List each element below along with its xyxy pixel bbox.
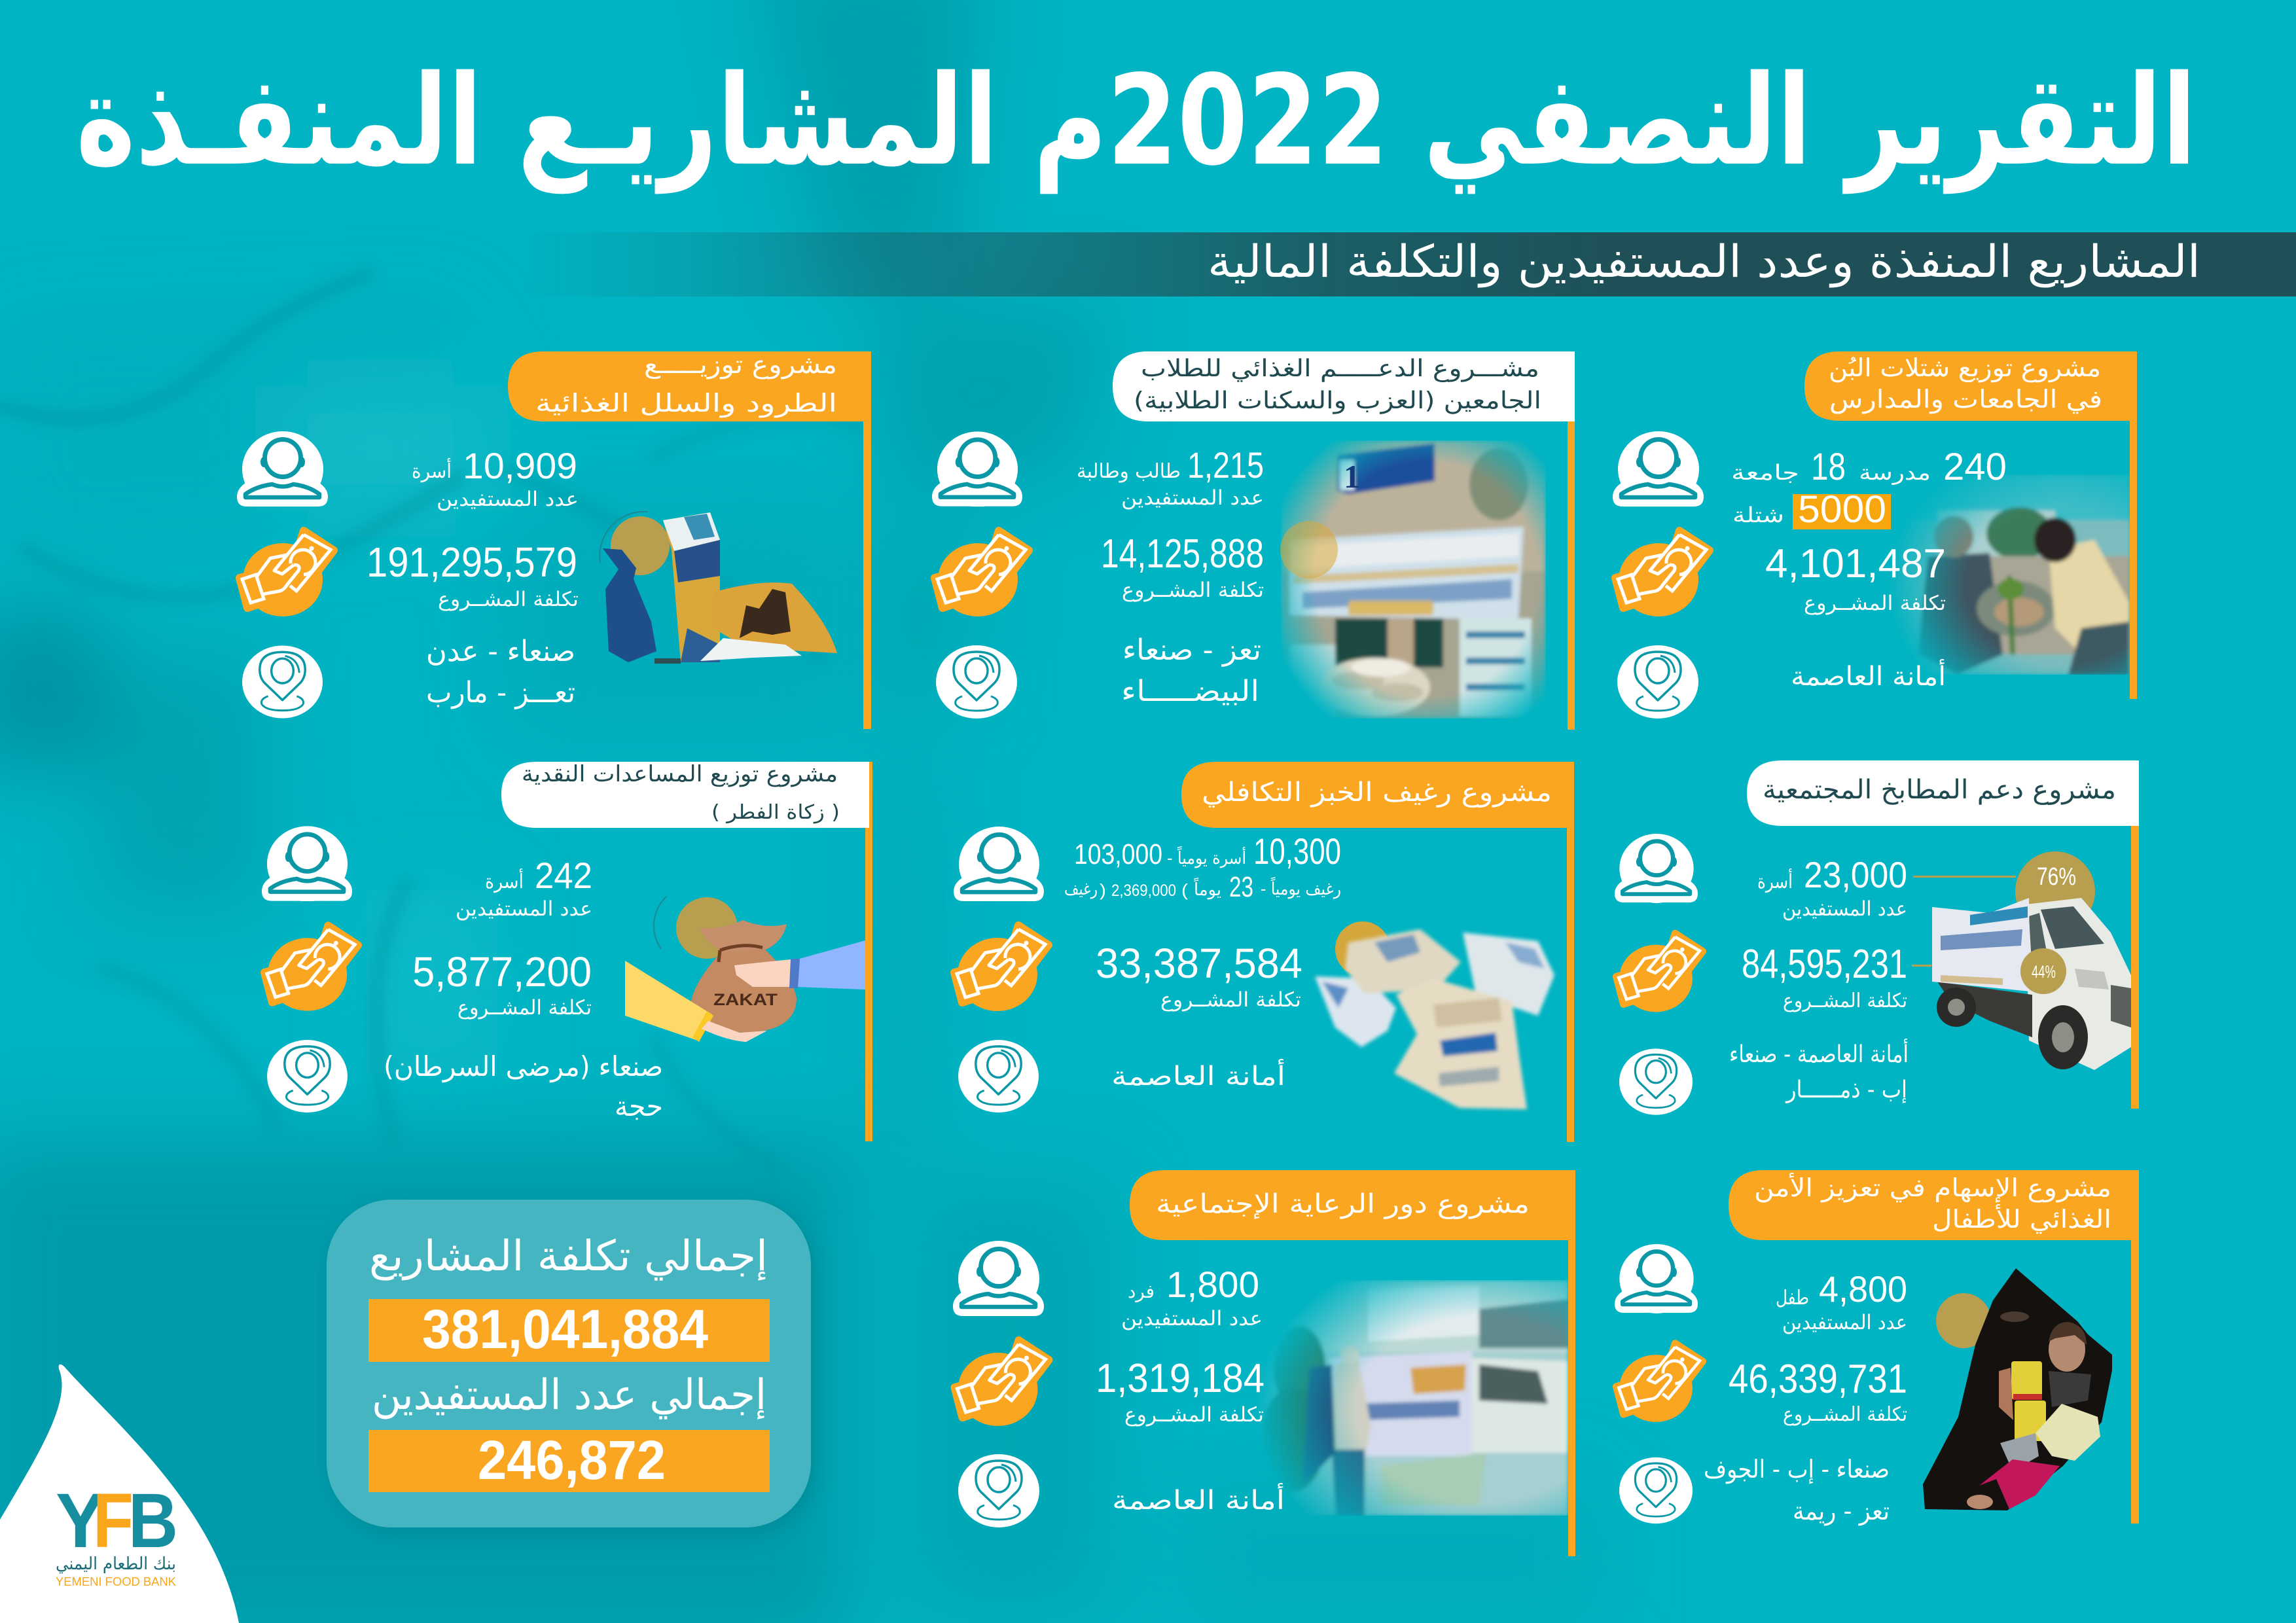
panel frame and heading: مشروع رغيف الخبز التكافلي [1202, 777, 1552, 808]
icon: location [936, 645, 1017, 719]
icon: beneficiaries [932, 431, 1022, 507]
logo: Yemeni Food Bank: YEMENI FOOD BANK [56, 1575, 176, 1588]
beneficiaries number: عدد المستفيدين [1782, 897, 1907, 921]
panel frame and heading: مشروع دعم المطابخ المجتمعية [1763, 775, 2116, 805]
icon: location [242, 645, 323, 719]
panel frame and heading: الطرود والسلل الغذائية [535, 389, 837, 418]
panel frame and heading: في الجامعات والمدارس [1829, 385, 2102, 414]
panel frame and heading [1130, 1170, 1575, 1556]
panel frame and heading [501, 761, 872, 1141]
icon: location [958, 1040, 1039, 1113]
locations: أمانة العاصمة - صنعاء [1729, 1039, 1909, 1068]
icon: location [958, 1454, 1039, 1527]
illustration: zakat bag [625, 897, 865, 1042]
beneficiaries figures: 2,369,000 [1111, 882, 1176, 900]
locations: البيضـــــاء [1121, 675, 1259, 708]
locations: صنعاء (مرضى السرطان) [384, 1050, 663, 1082]
beneficiaries figures: أسرة يومياً - [1167, 846, 1246, 868]
beneficiaries number: أسرة [412, 457, 452, 483]
panel frame and heading: الغذائي للأطفال [1932, 1204, 2111, 1234]
total cost value: 381,041,884 [422, 1298, 708, 1360]
total beneficiaries heading: إجمالي عدد المستفيدين [372, 1371, 766, 1419]
beneficiaries figures: رغيف [1064, 880, 1098, 899]
project cost: 4,101,487 [1765, 541, 1946, 586]
project cost: 46,339,731 [1729, 1357, 1907, 1402]
callout: 76 percent: 76% [2037, 863, 2076, 891]
callout: 44 percent [1912, 948, 2066, 994]
locations: حجة [615, 1090, 663, 1122]
photo: kitchen truck [1932, 898, 2131, 1070]
icon: cost [1617, 933, 1703, 1012]
panel frame and heading: مشروع توزيع المساعدات النقدية [522, 761, 838, 787]
photo: girls hostel [1281, 440, 1546, 719]
icon: beneficiaries [237, 431, 328, 507]
panel: community kitchens [1615, 760, 2139, 1115]
project cost [1096, 940, 1302, 1012]
project cost [1765, 541, 1946, 615]
project cost: تكلفة المشــروع [1783, 990, 1907, 1012]
beneficiaries number: عدد المستفيدين [1782, 1311, 1907, 1334]
project cost [1096, 1356, 1265, 1427]
icon: location [267, 1040, 348, 1113]
locations: تعز - صنعاء [1122, 633, 1261, 667]
icon: beneficiaries [954, 827, 1044, 902]
seedlings highlight [1732, 488, 1891, 531]
illustration: zakat bag: ZAKAT [713, 991, 778, 1009]
project cost: تكلفة المشــروع [1804, 592, 1946, 615]
beneficiaries number: عدد المستفيدين [437, 488, 579, 511]
panel: coffee seedlings [1613, 351, 2137, 719]
logo: Yemeni Food Bank: F [93, 1478, 134, 1564]
icon: cost [264, 925, 358, 1011]
beneficiaries figures: 18 [1811, 446, 1846, 488]
project cost: 14,125,888 [1101, 531, 1264, 577]
total beneficiaries value: 246,872 [478, 1429, 666, 1491]
beneficiaries number: فرد [1128, 1281, 1155, 1302]
panel frame and heading [1181, 762, 1574, 1142]
beneficiaries number: عدد المستفيدين [1121, 486, 1264, 510]
project cost: 1,319,184 [1096, 1356, 1265, 1401]
beneficiaries number: أسرة [485, 868, 524, 893]
beneficiaries number [456, 855, 592, 921]
beneficiaries figures: يوماً [1193, 877, 1221, 900]
beneficiaries number [1121, 1264, 1263, 1330]
beneficiaries figures: 10,300 [1253, 830, 1341, 872]
photo: food parcels [600, 512, 837, 664]
panel: student food support [932, 351, 1575, 730]
project cost: تكلفة المشــروع [1783, 1403, 1907, 1426]
callout: 44 percent: 44% [2032, 962, 2056, 982]
icon: cost [1617, 1344, 1703, 1422]
location: أمانة العاصمة [1112, 1483, 1285, 1516]
hostel sign number: 1 [1344, 458, 1360, 495]
subtitle band: المشاريع المنفذة وعدد المستفيدين والتكلفة المالية [1208, 236, 2200, 288]
beneficiaries number: 4,800 [1819, 1268, 1907, 1310]
icon: location [1619, 1048, 1693, 1115]
beneficiaries number [1776, 1268, 1907, 1334]
project cost [1729, 1357, 1907, 1426]
project cost: تكلفة المشــروع [457, 996, 592, 1020]
panel frame and heading: ( زكاة الفطر ) [711, 801, 840, 824]
panel: cash assistance zakat [262, 761, 872, 1141]
project cost: 5,877,200 [412, 948, 592, 995]
locations: تعـــز - مارب [426, 676, 575, 709]
logo: Yemeni Food Bank: Y [56, 1478, 105, 1564]
seedlings highlight: شتلة [1732, 503, 1784, 527]
photo: care home delivery [1255, 1280, 1568, 1516]
panel frame and heading [1747, 760, 2139, 1109]
icon: cost [954, 925, 1049, 1011]
panel: totals [327, 1200, 816, 1533]
subtitle band [524, 232, 2296, 296]
project cost: 33,387,584 [1096, 940, 1302, 987]
icon: location [1619, 1457, 1693, 1524]
photo: planting seedlings [1887, 474, 2130, 675]
beneficiaries figures: رغيف يومياً - [1261, 876, 1341, 899]
beneficiaries number: عدد المستفيدين [1121, 1307, 1263, 1330]
project cost [367, 539, 579, 611]
total cost heading: إجمالي تكلفة المشاريع [369, 1232, 768, 1281]
panel frame and heading [1729, 1170, 2139, 1524]
location: أمانة العاصمة [1791, 659, 1946, 692]
project cost: تكلفة المشــروع [1124, 1403, 1264, 1427]
panel frame and heading: مشروع دور الرعاية الإجتماعية [1156, 1189, 1530, 1219]
project cost: تكلفة المشــروع [438, 588, 579, 611]
gold accent [1280, 521, 1338, 579]
beneficiaries number [1757, 854, 1907, 921]
icon: beneficiaries [953, 1241, 1044, 1317]
beneficiaries number: 23,000 [1804, 854, 1907, 895]
beneficiaries number [1077, 444, 1264, 510]
beneficiaries figures: ( [1181, 880, 1188, 900]
beneficiaries figures: ) [1100, 880, 1106, 900]
icon: beneficiaries [1613, 431, 1704, 507]
beneficiaries figures: مدرسة [1859, 460, 1931, 485]
icon: beneficiaries [1615, 834, 1698, 903]
project cost: 84,595,231 [1742, 942, 1907, 987]
icon: cost [935, 531, 1029, 616]
locations: صنعاء - عدن [426, 635, 575, 668]
logo: Yemeni Food Bank: B [128, 1478, 178, 1564]
beneficiaries figures: جامعة [1731, 460, 1799, 485]
panel: food parcels and baskets [237, 350, 871, 729]
project cost [412, 948, 592, 1020]
beneficiaries figures [1064, 830, 1341, 903]
project cost [1742, 942, 1907, 1012]
icon: location [1617, 645, 1698, 719]
locations [1729, 1039, 1909, 1103]
icon: cost [954, 1340, 1049, 1426]
panel frame and heading: الجامعين (العزب والسكنات الطلابية) [1134, 387, 1541, 414]
panel frame and heading [1804, 351, 2137, 699]
panel frame and heading [1113, 351, 1575, 730]
photo: mother and child [1923, 1268, 2112, 1510]
beneficiaries number: عدد المستفيدين [456, 897, 592, 921]
photo: bread bags [1315, 921, 1554, 1109]
callout: 76 percent [1913, 851, 2095, 931]
locations [426, 635, 575, 709]
panel: care homes [953, 1170, 1575, 1556]
beneficiaries figures: 240 [1943, 446, 2007, 488]
panel frame and heading [508, 350, 871, 729]
locations: إب - ذمــــــار [1785, 1077, 1907, 1103]
beneficiaries figures: 23 [1229, 871, 1253, 903]
locations: تعز - ريمة [1793, 1497, 1890, 1526]
beneficiaries number: 10,909 [463, 445, 577, 486]
total beneficiaries value [368, 1429, 770, 1492]
panel: child food security [1615, 1170, 2139, 1526]
beneficiaries number: طالب وطالبة [1077, 460, 1181, 483]
icon: beneficiaries [1615, 1244, 1698, 1313]
beneficiaries number: أسرة [1757, 868, 1793, 893]
icon: cost [1615, 531, 1710, 616]
project cost: 191,295,579 [367, 539, 577, 586]
seedlings highlight: 5000 [1798, 488, 1886, 531]
locations [1121, 633, 1261, 708]
beneficiaries number: 1,215 [1187, 444, 1264, 486]
beneficiaries figures: 103,000 [1074, 838, 1162, 870]
location: أمانة العاصمة [1111, 1059, 1285, 1092]
panel frame and heading: مشـــروع الدعـــــم الغذائي للطلاب [1141, 355, 1539, 382]
icon: cost [240, 531, 334, 616]
icon: beneficiaries [262, 826, 352, 902]
panel frame and heading: مشروع توزيـــــع [644, 350, 837, 380]
project cost [1101, 531, 1264, 602]
beneficiaries number: 242 [535, 855, 592, 896]
locations: صنعاء - إب - الجوف [1704, 1455, 1890, 1484]
beneficiaries number: طفل [1776, 1287, 1809, 1310]
logo: Yemeni Food Bank: بنك الطعام اليمني [56, 1554, 176, 1574]
beneficiaries number [412, 445, 579, 511]
locations [1704, 1455, 1890, 1526]
beneficiaries figures [1731, 446, 2007, 488]
project cost: تكلفة المشــروع [1160, 988, 1301, 1012]
panel: bread loaf [954, 762, 1574, 1142]
locations [384, 1050, 663, 1122]
beneficiaries number: 1,800 [1166, 1264, 1259, 1305]
panel frame and heading: مشروع توزيع شتلات البُن [1829, 353, 2101, 383]
logo: Yemeni Food Bank [0, 1364, 239, 1623]
project cost: تكلفة المشــروع [1122, 579, 1264, 602]
panel frame and heading: مشروع الإسهام في تعزيز الأمن [1754, 1172, 2111, 1203]
